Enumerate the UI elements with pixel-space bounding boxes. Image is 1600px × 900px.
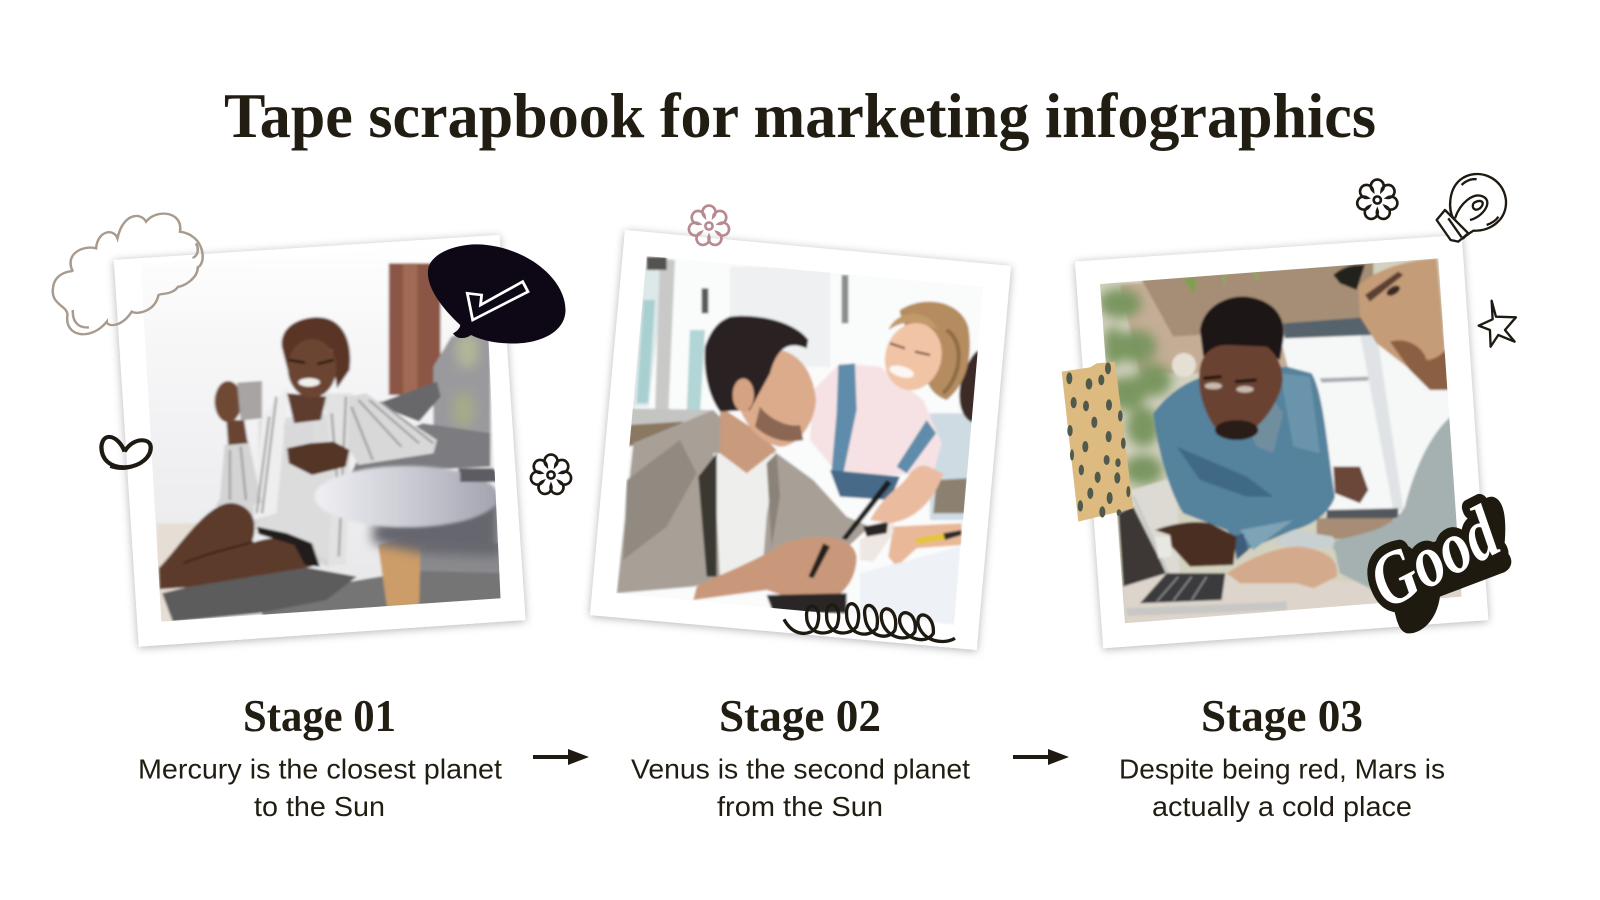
description: stage 03: actually a cold place [1152,791,1412,822]
icon: flower doodle above card 3 [1357,180,1397,219]
description: stage 01: to the Sun [254,791,385,822]
photo: woman with mug and phone [146,262,500,622]
white photo frame 3 [1075,235,1488,648]
icon: cloud doodle [53,214,203,334]
description: stage 02 [631,754,970,822]
photo: two men at a laptop [1093,253,1470,630]
arrow: stage 02 to 03 [1013,749,1069,765]
arrow: stage 01 to 02 [533,749,589,765]
description: stage 01 [138,754,502,822]
heading: Stage 01: Stage 01 [243,690,396,741]
heading: Stage 03: Stage 03 [1201,690,1363,741]
icon: pink flower doodle [689,206,729,245]
description: stage 02: from the Sun [717,791,883,822]
description: stage 03: Despite being red, Mars is [1119,754,1445,784]
panel: stage 03 photo card [1062,174,1516,648]
icon: star doodle [1479,301,1516,347]
heading: Stage 02: Stage 02 [719,690,881,741]
photo: man and woman at a table [616,256,978,625]
panel: stage 01 photo card [53,214,566,647]
description: stage 01: Mercury is the closest planet [138,754,502,784]
description: stage 03 [1119,754,1445,822]
icon: heart doodle [101,437,151,468]
sticker: Good: Good [1357,490,1513,624]
description: stage 02: Venus is the second planet [631,754,970,784]
icon: flower doodle right of card 1 [531,455,571,494]
icon: speech bubble with check [428,244,566,343]
panel: stage 02 photo card [590,206,1011,650]
tape strip with drop pattern [1062,362,1133,522]
icon: spiral scribble [784,604,955,642]
stage 02 label [631,690,970,822]
stage 03 label [1119,690,1445,822]
white photo frame 1 [114,235,526,647]
stage 01 label [138,690,502,822]
title: Tape scrapbook for marketing infographics [224,80,1376,151]
icon: light bulb doodle [1437,174,1506,242]
white photo frame 2 [590,230,1011,650]
